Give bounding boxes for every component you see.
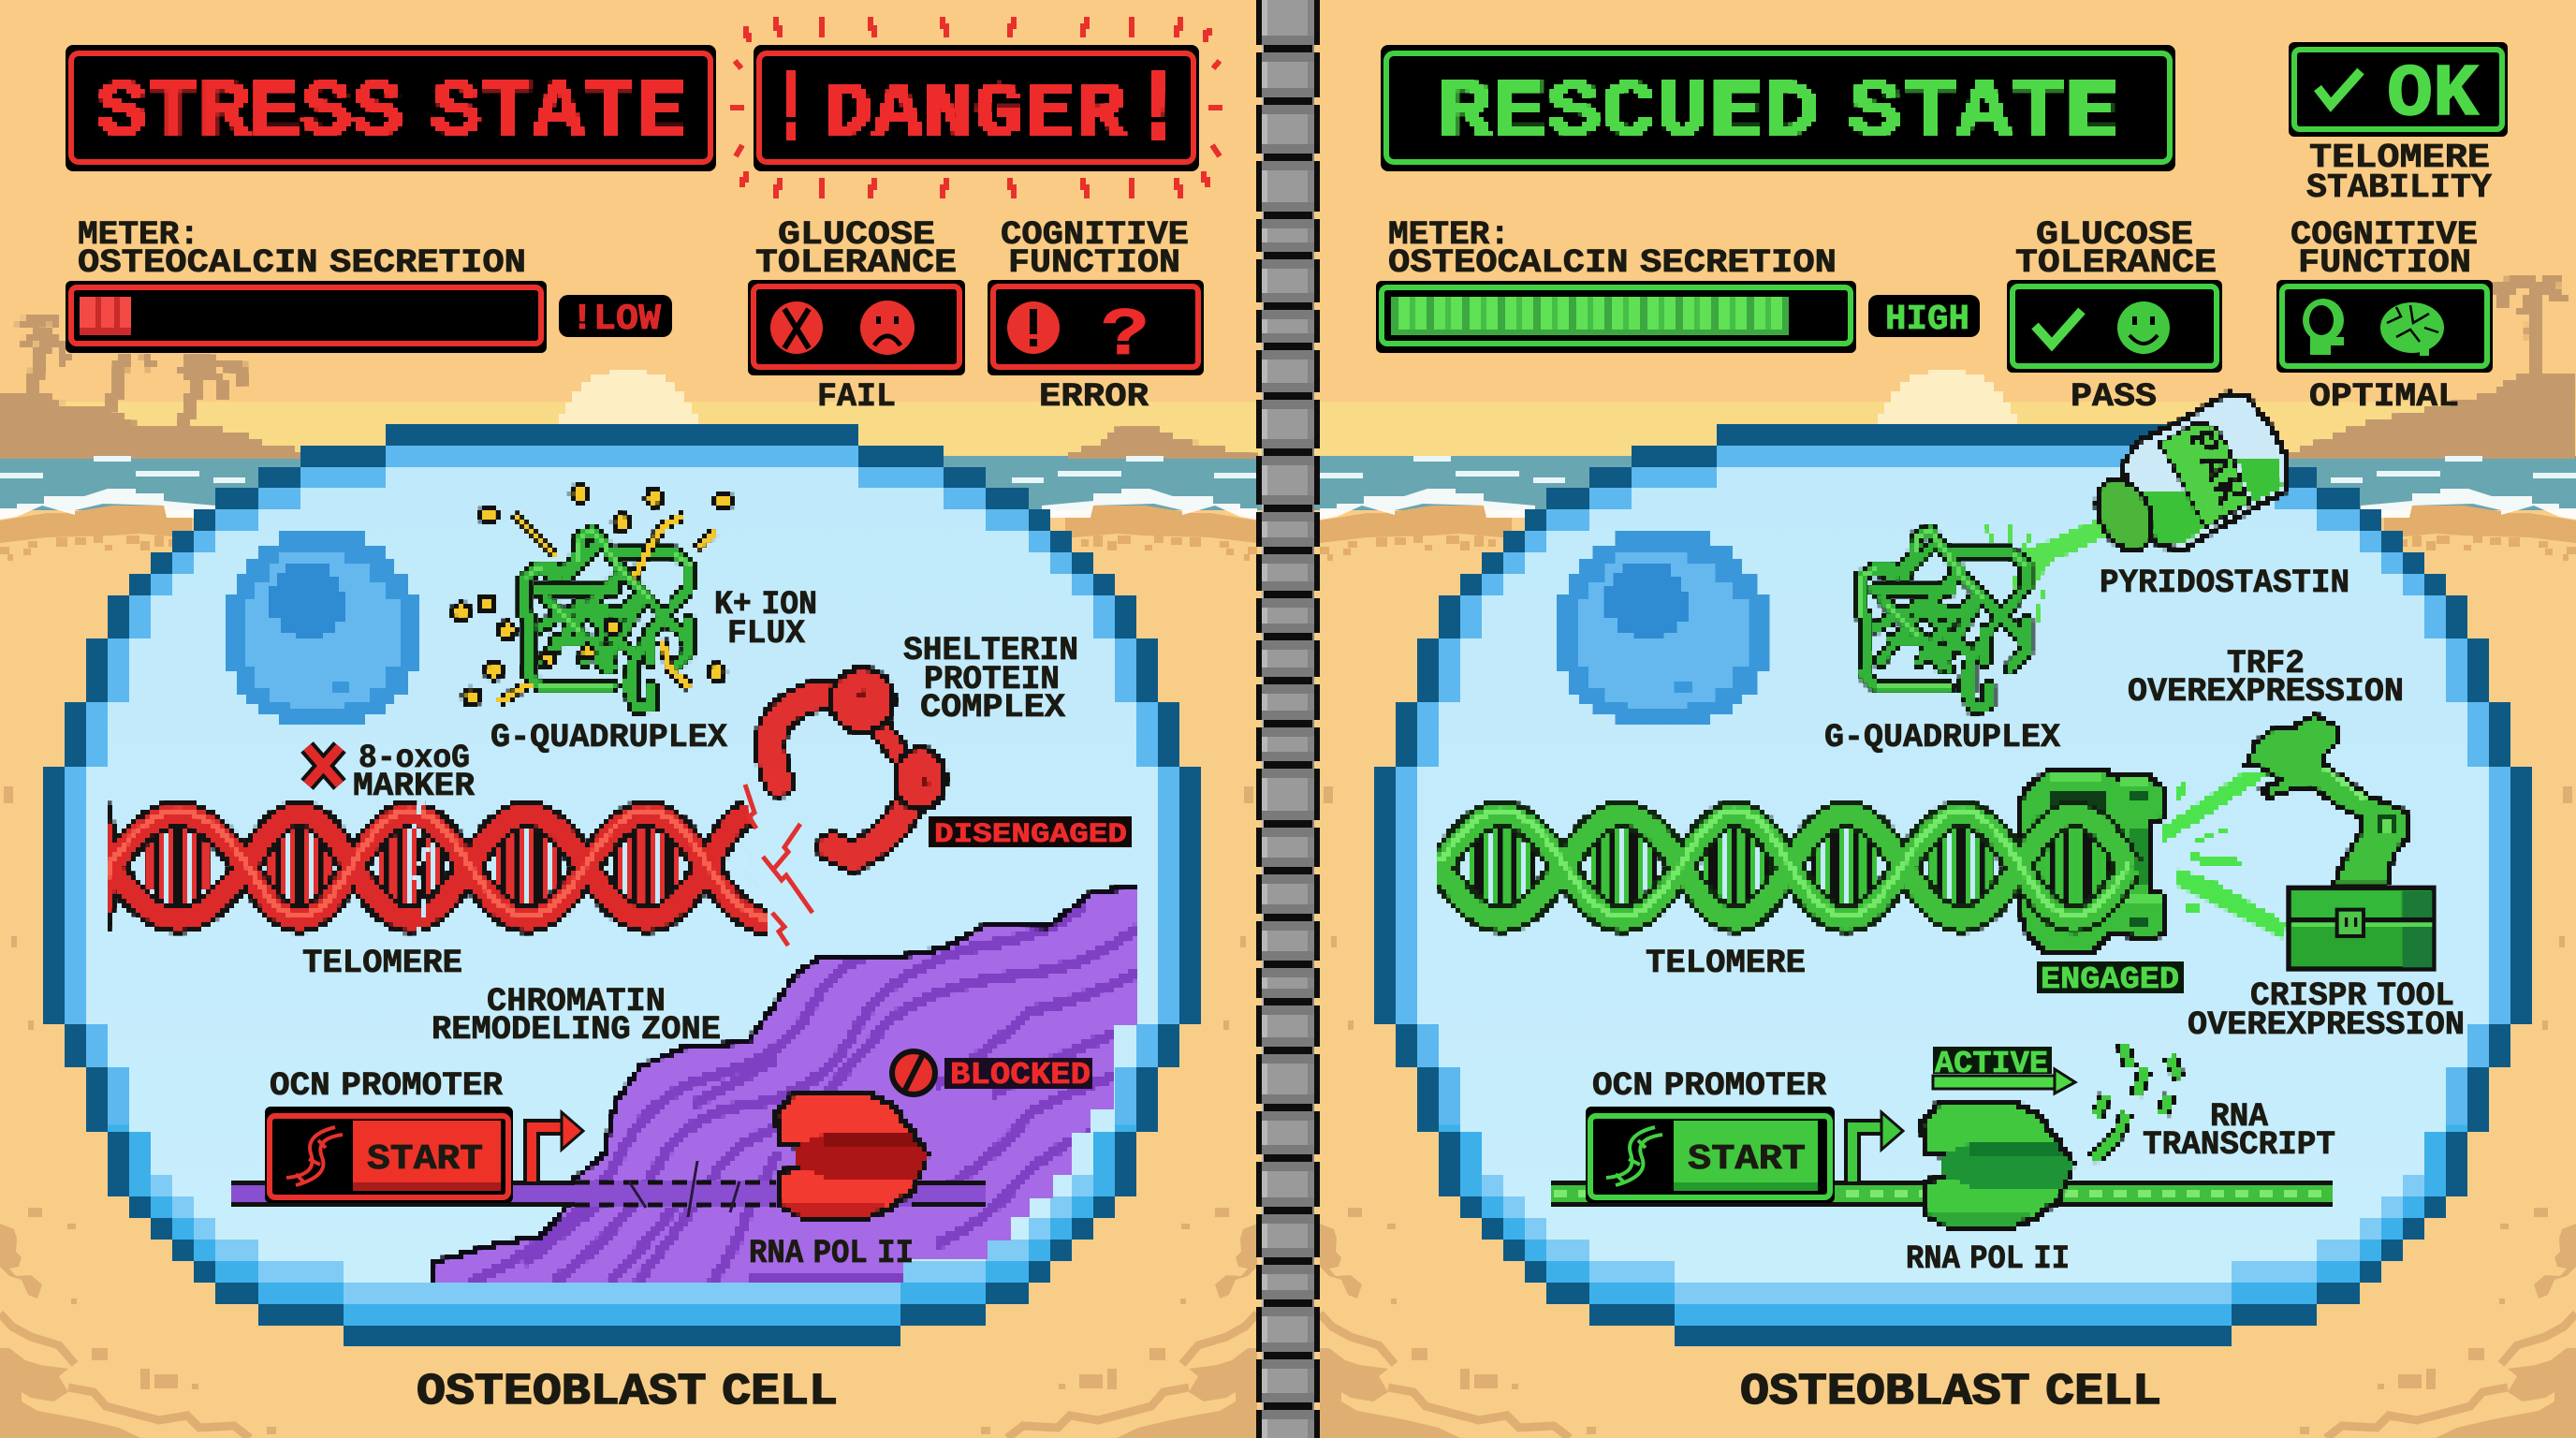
label: chromatin remodeling zone: CHROMATIN (487, 983, 666, 1020)
label: 8-oxog marker: 8-oxoG (359, 740, 470, 777)
label: shelterin protein complex: COMPLEX (920, 689, 1065, 726)
telomere dna healthy (1440, 770, 2165, 952)
icon: sad face (860, 301, 915, 355)
label: telomere right: TELOMERE (1646, 945, 1806, 982)
label: meter osteocalcin secretion left (78, 216, 526, 282)
label: glucose tolerance right (2015, 216, 2217, 282)
button: start (353, 1121, 501, 1191)
button: start (1674, 1121, 1818, 1191)
label: telomere stability: TELOMERE (2309, 139, 2490, 177)
label: ocn promoter right: OCN PROMOTER (1592, 1067, 1826, 1105)
icon: check (2318, 71, 2361, 105)
label: shelterin protein complex (903, 632, 1078, 726)
icon: red x marker (307, 747, 340, 785)
pyridostatin bottle (2086, 393, 2287, 560)
icon: blocked sign (892, 1051, 935, 1094)
icon: x circle (770, 301, 823, 354)
label: crispr tool overexpression (2188, 977, 2465, 1044)
label: optimal: OPTIMAL (2309, 378, 2459, 416)
label: shelterin protein complex: SHELTERIN (903, 632, 1078, 669)
label: error: ERROR (1039, 378, 1149, 416)
badge: blocked: BLOCKED (950, 1058, 1090, 1093)
potassium ions and frayed strands (453, 485, 732, 705)
label: glucose tolerance left: GLUCOSE (778, 216, 935, 254)
g-quadruplex stressed (453, 485, 732, 709)
crispr toolbox (2289, 888, 2434, 969)
badge: high: HIGH (1885, 300, 1969, 340)
icon: dna small (286, 1127, 343, 1185)
label: rna pol ii left: RNA POL II (749, 1235, 914, 1272)
bent arrow left (532, 1112, 583, 1181)
beach island and palm trees left (0, 318, 300, 456)
label: fail: FAIL (817, 378, 896, 416)
label: pass: PASS (2071, 378, 2157, 416)
status box: glucose fail (748, 280, 965, 375)
meter bar high (1376, 281, 1856, 353)
label: meter osteocalcin secretion left: METER: (78, 216, 199, 254)
ocn start box active (1586, 1107, 1835, 1203)
text: ok: OK (2387, 52, 2480, 137)
bottle label (2159, 421, 2249, 527)
panel: ok status (2289, 42, 2508, 137)
label: cognitive function left (1001, 216, 1189, 282)
sun left (559, 370, 698, 424)
label: crispr tool overexpression: OVEREXPRESSION (2188, 1006, 2465, 1044)
bottle liquid (2144, 457, 2282, 545)
label: crispr tool overexpression: CRISPR TOOL (2250, 977, 2454, 1015)
cell outline right (1374, 424, 2532, 1346)
bottle glass (2122, 393, 2287, 550)
telomere dna damaged (94, 798, 769, 936)
status box: cognitive optimal (2276, 280, 2493, 373)
badge: active: ACTIVE (1935, 1047, 2048, 1081)
label: trf2 overexpression: OVEREXPRESSION (2128, 673, 2404, 711)
pyridostatin beam (1986, 520, 2114, 623)
bottle cap (2086, 470, 2163, 560)
chromatin remodeling zone (432, 887, 1137, 1283)
sand detail left panel, left side (0, 456, 276, 1438)
button: start: START (1688, 1139, 1806, 1180)
label: trf2 overexpression: TRF2 (2227, 645, 2305, 682)
label: rna pol ii right: RNA POL II (1906, 1240, 2070, 1278)
label: g-quadruplex left: G-QUADRUPLEX (490, 719, 727, 756)
shelterin clamp engaged (2019, 770, 2165, 952)
promoter dna track blocked (231, 1161, 986, 1217)
icon: brain (2380, 302, 2444, 356)
shelterin claw disengaged (771, 668, 945, 857)
label: meter osteocalcin secretion right: METER: (1388, 216, 1510, 254)
label: meter osteocalcin secretion right: OSTEOCALCIN SECRETION (1388, 244, 1837, 282)
danger spark rays (730, 17, 1222, 198)
label: cognitive function right: FUNCTION (2298, 244, 2471, 282)
label text: PAK (2176, 422, 2248, 514)
beach island and palm tree right (2284, 279, 2576, 456)
damage sparks (745, 785, 812, 946)
label: pyridostastin: PYRIDOSTASTIN (2100, 565, 2349, 602)
label: chromatin remodeling zone: REMODELING ZONE (432, 1011, 721, 1049)
heading: rescued state: RESCUED STATE (1438, 69, 2120, 158)
label: rna transcript: RNA (2210, 1098, 2268, 1136)
icon: exclamation circle (1007, 301, 1060, 354)
label: cognitive function left: FUNCTION (1008, 244, 1180, 282)
arrow: active (1933, 1069, 2075, 1093)
icon: dna small (1606, 1127, 1662, 1185)
label: ocn promoter left: OCN PROMOTER (270, 1067, 503, 1105)
exclamation right: ! (1134, 51, 1181, 170)
label: glucose tolerance right: GLUCOSE (2036, 216, 2193, 254)
status box: glucose pass (2007, 280, 2222, 373)
label: meter osteocalcin secretion left: OSTEOCALCIN SECRETION (78, 244, 526, 282)
sun right (1878, 370, 2017, 424)
heading: stress state: STRESS STATE (96, 69, 686, 158)
label: telomere stability (2306, 139, 2492, 207)
badge: disengaged: DISENGAGED (934, 819, 1127, 851)
label: k+ ion flux: K+ ION (714, 586, 817, 624)
label: 8-oxog marker (353, 740, 475, 805)
label: osteoblast cell right: OSTEOBLAST CELL (1740, 1368, 2161, 1417)
label: chromatin remodeling zone (432, 983, 721, 1049)
badge: low: !LOW (571, 299, 662, 340)
label: g-quadruplex right: G-QUADRUPLEX (1824, 719, 2060, 756)
label: rna transcript (2143, 1098, 2335, 1164)
heading: danger: DANGER (822, 70, 1126, 157)
nucleus right (1557, 531, 1770, 725)
stone wall divider (1256, 0, 1320, 1438)
ocn start box blocked (265, 1107, 513, 1203)
status box: cognitive error (988, 280, 1204, 375)
label: 8-oxog marker: MARKER (353, 768, 475, 805)
panel: rescued state header (1381, 45, 2175, 171)
label: glucose tolerance right: TOLERANCE (2015, 244, 2217, 282)
label: glucose tolerance left (755, 216, 957, 282)
sand detail right panel, left side (1320, 456, 1596, 1438)
sand detail left panel, right side (981, 456, 1257, 1438)
label: telomere stability: STABILITY (2306, 169, 2492, 207)
crispr robot arm (2247, 714, 2408, 885)
crispr beams (2162, 772, 2287, 939)
label: cognitive function left: COGNITIVE (1001, 216, 1189, 254)
panel: danger alert (754, 45, 1199, 171)
label: cognitive function right (2291, 216, 2478, 282)
badge: high (1868, 295, 1980, 340)
icon: smile face (2117, 301, 2170, 354)
g-quadruplex stabilized (1861, 531, 2027, 709)
rna polymerase ii active (1922, 1103, 2072, 1228)
badge: engaged: ENGAGED (2041, 962, 2179, 997)
nucleus left (226, 531, 419, 725)
label: meter osteocalcin secretion right (1388, 216, 1837, 282)
label: k+ ion flux: FLUX (727, 615, 805, 653)
label: telomere left: TELOMERE (302, 945, 462, 982)
label: trf2 overexpression (2128, 645, 2404, 711)
label: rna transcript: TRANSCRIPT (2143, 1126, 2335, 1164)
rna polymerase ii blocked (776, 1093, 927, 1219)
sand detail right panel, right side (2300, 456, 2576, 1438)
exclamation left: ! (768, 51, 814, 170)
bent arrow right (1852, 1112, 1903, 1181)
small hill left panel (1067, 424, 1257, 456)
promoter dna track active (1551, 1181, 2333, 1207)
icon: check (2035, 311, 2082, 345)
label: cognitive function right: COGNITIVE (2291, 216, 2478, 254)
cell outline left (43, 424, 1201, 1346)
label: k+ ion flux (714, 586, 817, 653)
button: start: START (367, 1139, 483, 1180)
icon: head (2303, 299, 2344, 355)
label: shelterin protein complex: PROTEIN (924, 661, 1060, 698)
panel: stress state header (66, 45, 716, 171)
label: glucose tolerance left: TOLERANCE (755, 244, 957, 282)
label: osteoblast cell left: OSTEOBLAST CELL (417, 1368, 838, 1417)
icon: question mark: ? (1101, 298, 1149, 374)
meter bar low (66, 281, 547, 353)
rna transcript fragments (2092, 1044, 2179, 1159)
